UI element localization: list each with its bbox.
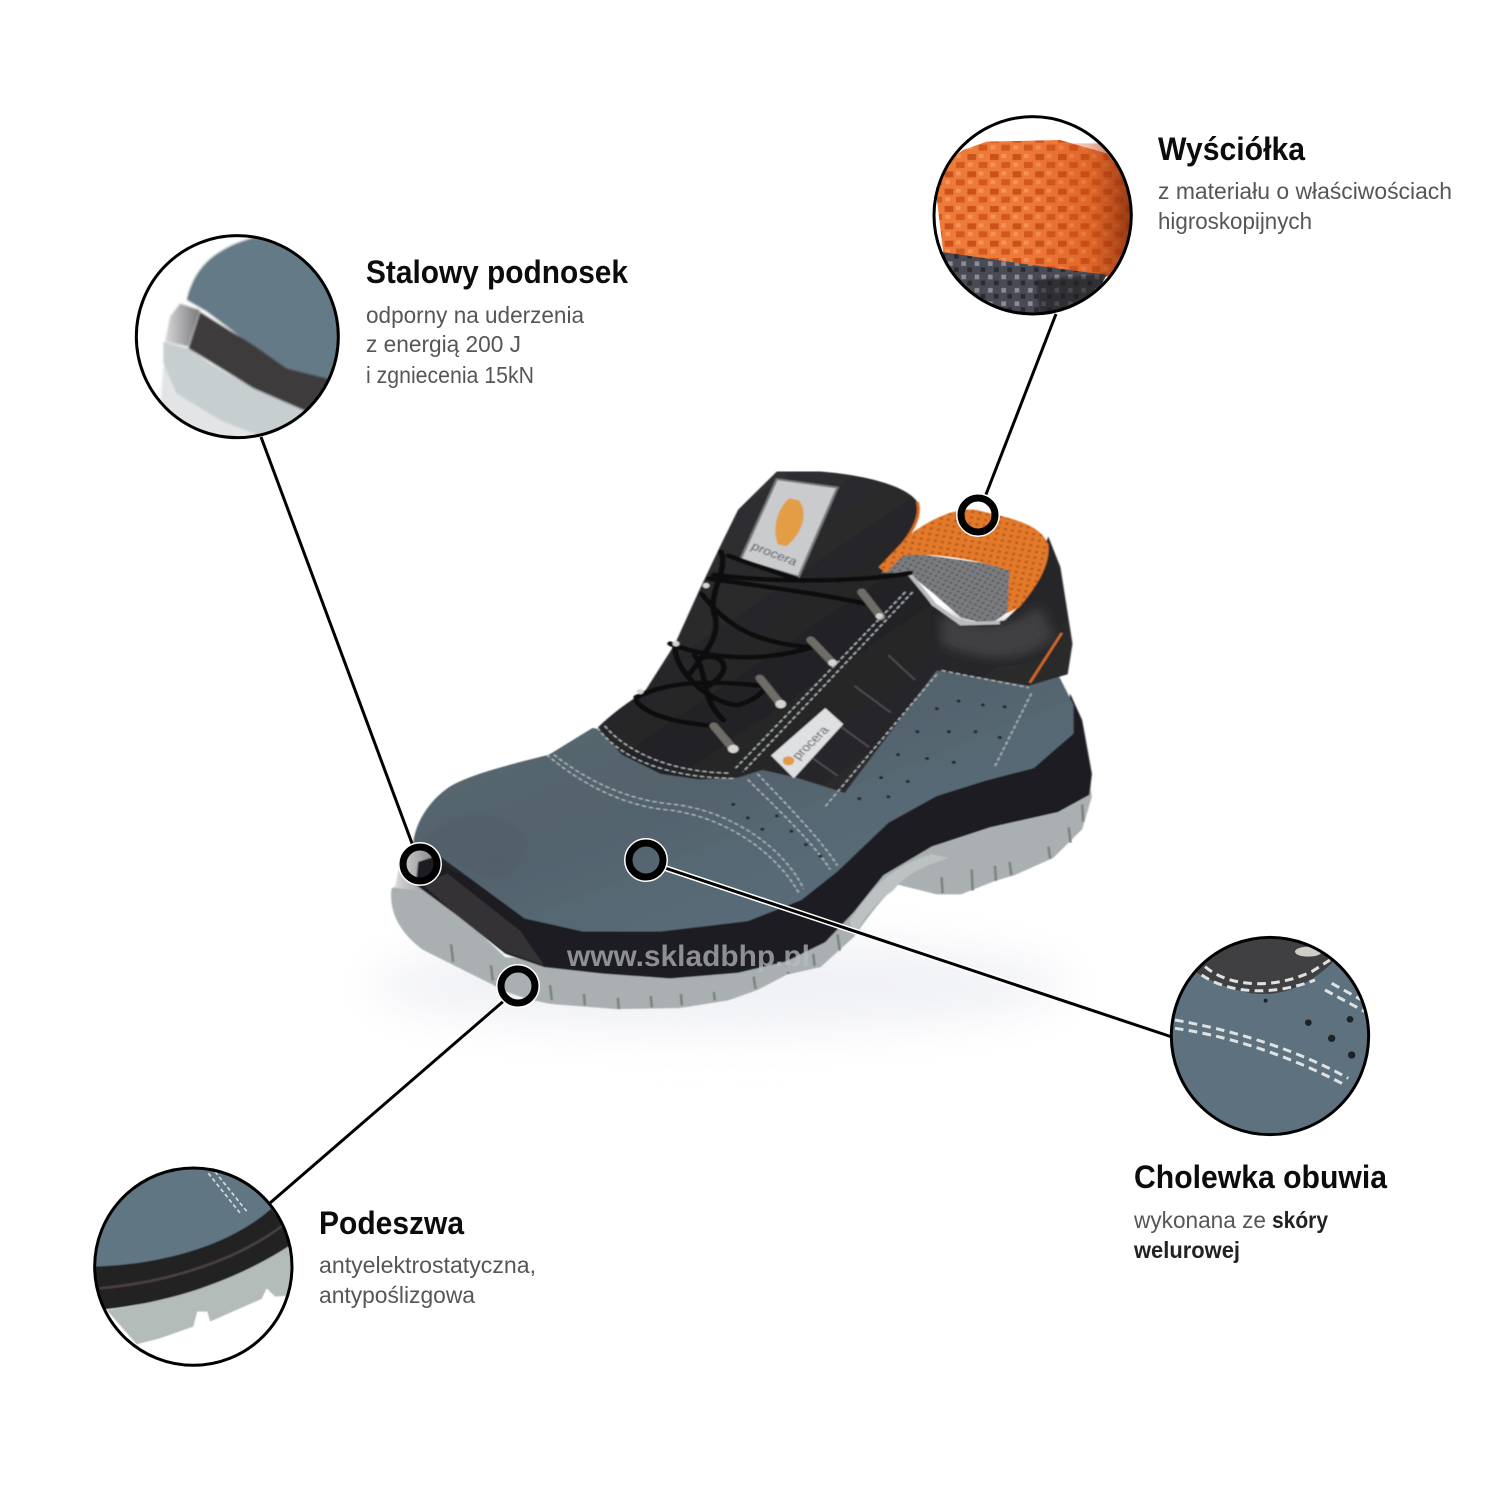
text block: Stalowy podnosek <box>366 254 628 388</box>
metal hooks <box>714 592 881 749</box>
orange piping <box>1030 633 1062 683</box>
toe grey bumper <box>395 841 445 891</box>
midsole <box>416 693 1092 979</box>
text block: Stalowy podnosek: odporny na uderzenia <box>366 302 584 328</box>
marker: sole <box>497 965 539 1007</box>
suede upper <box>413 667 1073 931</box>
laces <box>636 552 910 726</box>
perforations <box>731 700 1007 858</box>
text block: Stalowy podnosek: i zgniecenia 15kN <box>366 362 534 388</box>
text block: Cholewka obuwia: skóry <box>1272 1207 1328 1233</box>
watermark: www.skladbhp.pl <box>566 940 810 973</box>
orange lining <box>879 510 1049 613</box>
suede shading <box>418 814 530 881</box>
leader line: sole <box>270 999 506 1203</box>
inner mesh <box>881 552 1014 625</box>
leather collar and tongue <box>598 471 1073 793</box>
shoe photo <box>391 471 1092 1009</box>
marker: lining <box>957 494 999 536</box>
text block: Podeszwa: Podeszwa <box>319 1205 464 1241</box>
side label <box>771 708 843 778</box>
text block: Cholewka obuwia: wykonana ze <box>1133 1207 1266 1233</box>
collar pale edge <box>910 575 1000 624</box>
tongue label <box>740 479 837 577</box>
text block: Podeszwa: antypoślizgowa <box>319 1282 475 1308</box>
side straps <box>813 655 915 776</box>
leather highlights <box>942 605 1053 657</box>
detail circle: orange lining <box>932 115 1133 316</box>
stitching <box>547 592 1031 892</box>
leader line: upper <box>662 867 1172 1037</box>
text block: Wyściółka: z materiału o właściwościach <box>1158 178 1452 204</box>
detail circle: sole <box>93 1166 294 1367</box>
text block: Wyściółka: higroskopijnych <box>1158 208 1312 234</box>
floor shadow <box>370 937 1070 1033</box>
tongue label: procera <box>749 539 801 568</box>
detail circle: steel toe cap <box>134 234 340 440</box>
midsole toe highlight <box>423 873 544 965</box>
side label: procera <box>788 723 833 762</box>
text block: Stalowy podnosek: z energią 200 J <box>366 331 521 357</box>
leader line: lining <box>985 314 1056 497</box>
leader line: steel toe cap <box>261 437 413 846</box>
text block: Cholewka obuwia: Cholewka obuwia <box>1134 1159 1387 1195</box>
text block: Podeszwa <box>319 1205 536 1308</box>
marker: toe cap <box>399 843 441 885</box>
hook highlights <box>637 583 883 753</box>
arch highlight <box>850 854 949 936</box>
text block: Cholewka obuwia: welurowej <box>1133 1237 1240 1263</box>
tongue orange edge <box>898 502 918 550</box>
text block: Podeszwa: antyelektrostatyczna, <box>319 1252 536 1278</box>
text block: Wyściółka <box>1158 131 1452 234</box>
outsole <box>391 766 1092 1009</box>
tread grooves <box>451 804 1083 1009</box>
text block: Stalowy podnosek: Stalowy podnosek <box>366 254 628 290</box>
infographic: safety shoe features <box>93 115 1450 1367</box>
text block: Wyściółka: Wyściółka <box>1158 131 1305 167</box>
detail circle: suede upper <box>1170 936 1370 1136</box>
text block: Cholewka obuwia <box>1133 1159 1387 1263</box>
marker: upper <box>625 839 667 881</box>
